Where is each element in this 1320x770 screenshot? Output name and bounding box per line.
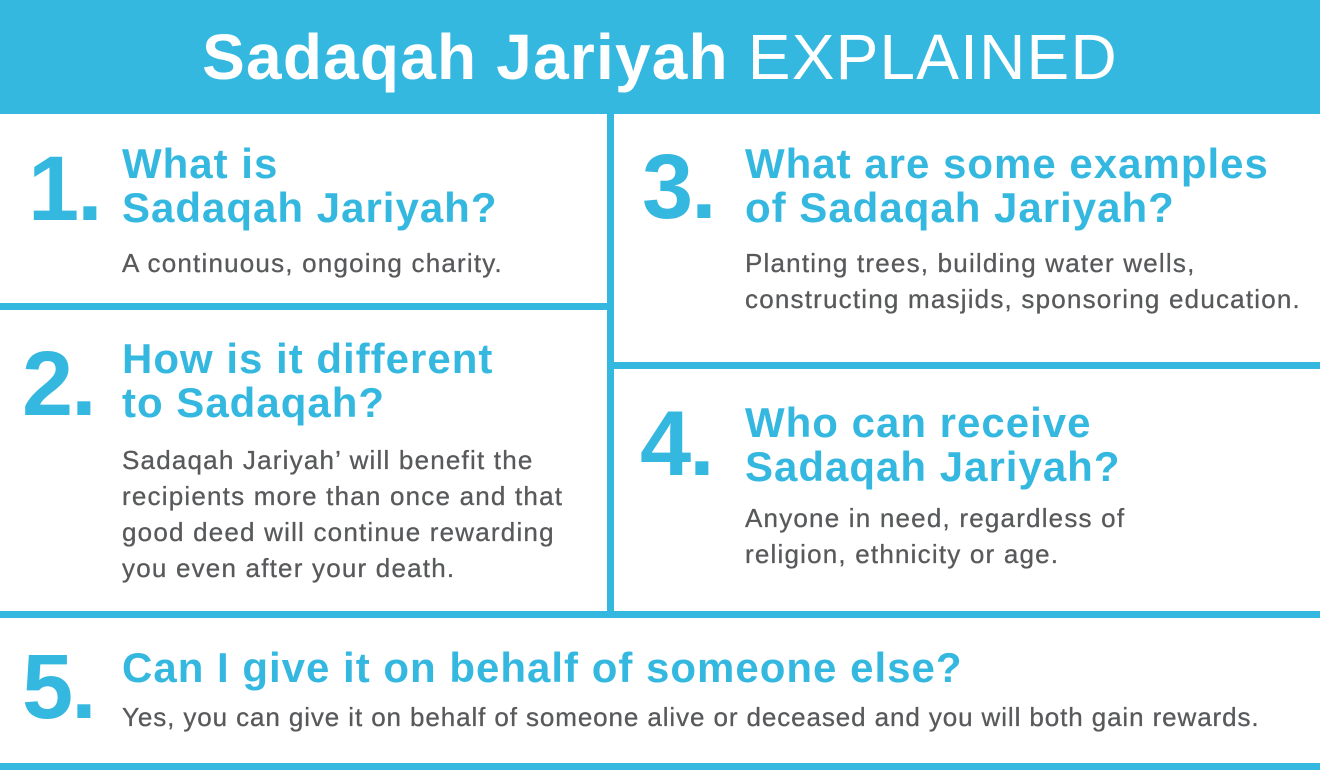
header bar — [0, 0, 1320, 114]
heading 1: Sadaqah Jariyah? — [122, 184, 497, 231]
number 5: 5. — [22, 636, 95, 738]
heading 2: How is it different — [122, 335, 493, 382]
body 2: you even after your death. — [122, 553, 455, 583]
heading 2 — [122, 335, 493, 426]
body 4 — [744, 503, 1125, 569]
number 3: 3. — [642, 136, 715, 238]
body 2: recipients more than once and that — [122, 481, 563, 511]
body 3: constructing masjids, sponsoring education. — [745, 284, 1301, 314]
heading 1 — [122, 140, 497, 231]
panel 2 — [22, 333, 563, 583]
body 4: Anyone in need, regardless of — [745, 503, 1125, 533]
number 1: 1. — [28, 138, 101, 240]
body 3: Planting trees, building water wells, — [745, 248, 1196, 278]
heading 3: What are some examples — [745, 140, 1269, 187]
panel 4 — [640, 393, 1125, 569]
heading 3: of Sadaqah Jariyah? — [745, 184, 1175, 231]
heading 5: Can I give it on behalf of someone else? — [122, 644, 962, 691]
panel 1 — [28, 138, 503, 278]
body 2 — [122, 445, 563, 583]
panel 3 — [642, 136, 1301, 314]
body 3 — [745, 248, 1301, 314]
body 2: good deed will continue rewarding — [122, 517, 555, 547]
number 4: 4. — [640, 393, 713, 495]
panel 5 — [22, 636, 1260, 738]
body 1: A continuous, ongoing charity. — [122, 248, 503, 278]
heading 4: Who can receive — [745, 399, 1091, 446]
number 2: 2. — [22, 333, 95, 435]
heading 2: to Sadaqah? — [122, 379, 385, 426]
heading 4 — [745, 399, 1120, 490]
heading 3 — [745, 140, 1269, 231]
body 4: religion, ethnicity or age. — [745, 539, 1059, 569]
body 5: Yes, you can give it on behalf of someone alive or deceased and you will both gain rewards. — [122, 702, 1260, 732]
heading 4: Sadaqah Jariyah? — [745, 443, 1120, 490]
title: Sadaqah Jariyah EXPLAINED — [202, 21, 1118, 93]
body 2: Sadaqah Jariyah’ will benefit the — [122, 445, 534, 475]
heading 1: What is — [122, 140, 278, 187]
